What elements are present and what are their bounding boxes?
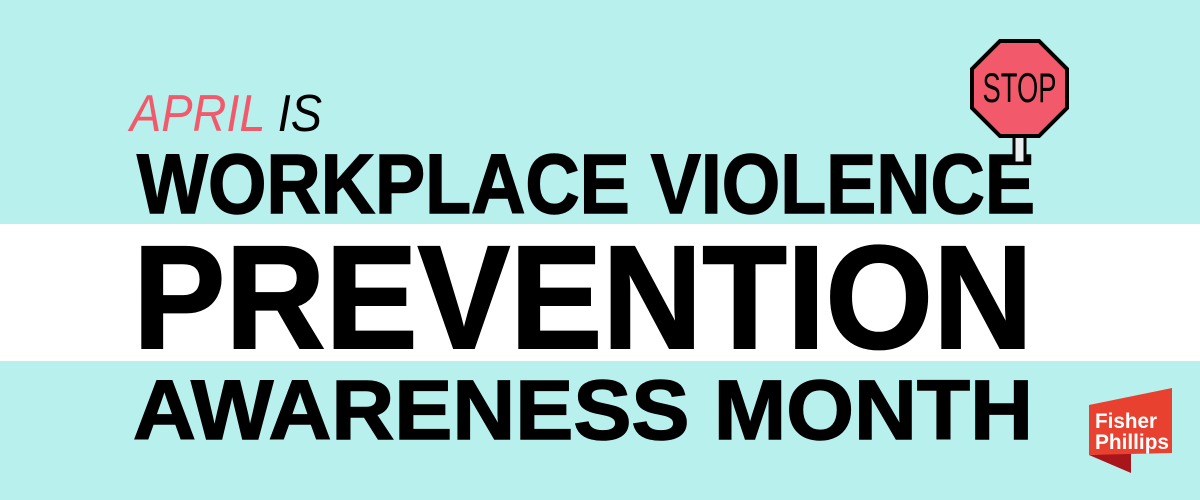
title line 1: WORKPLACE VIOLENCE xyxy=(137,137,1035,231)
logo: Fisher Phillips xyxy=(1089,388,1172,473)
logo: Fisher Phillips: Phillips xyxy=(1095,431,1169,454)
title line 2: PREVENTION xyxy=(133,216,1033,380)
title line 3: AWARENESS MONTH xyxy=(133,363,1033,457)
subtitle: April is: APRIL IS xyxy=(127,85,322,143)
white band xyxy=(0,224,1200,361)
icon: stop sign xyxy=(970,39,1069,162)
logo: Fisher Phillips: Fisher xyxy=(1095,410,1157,433)
